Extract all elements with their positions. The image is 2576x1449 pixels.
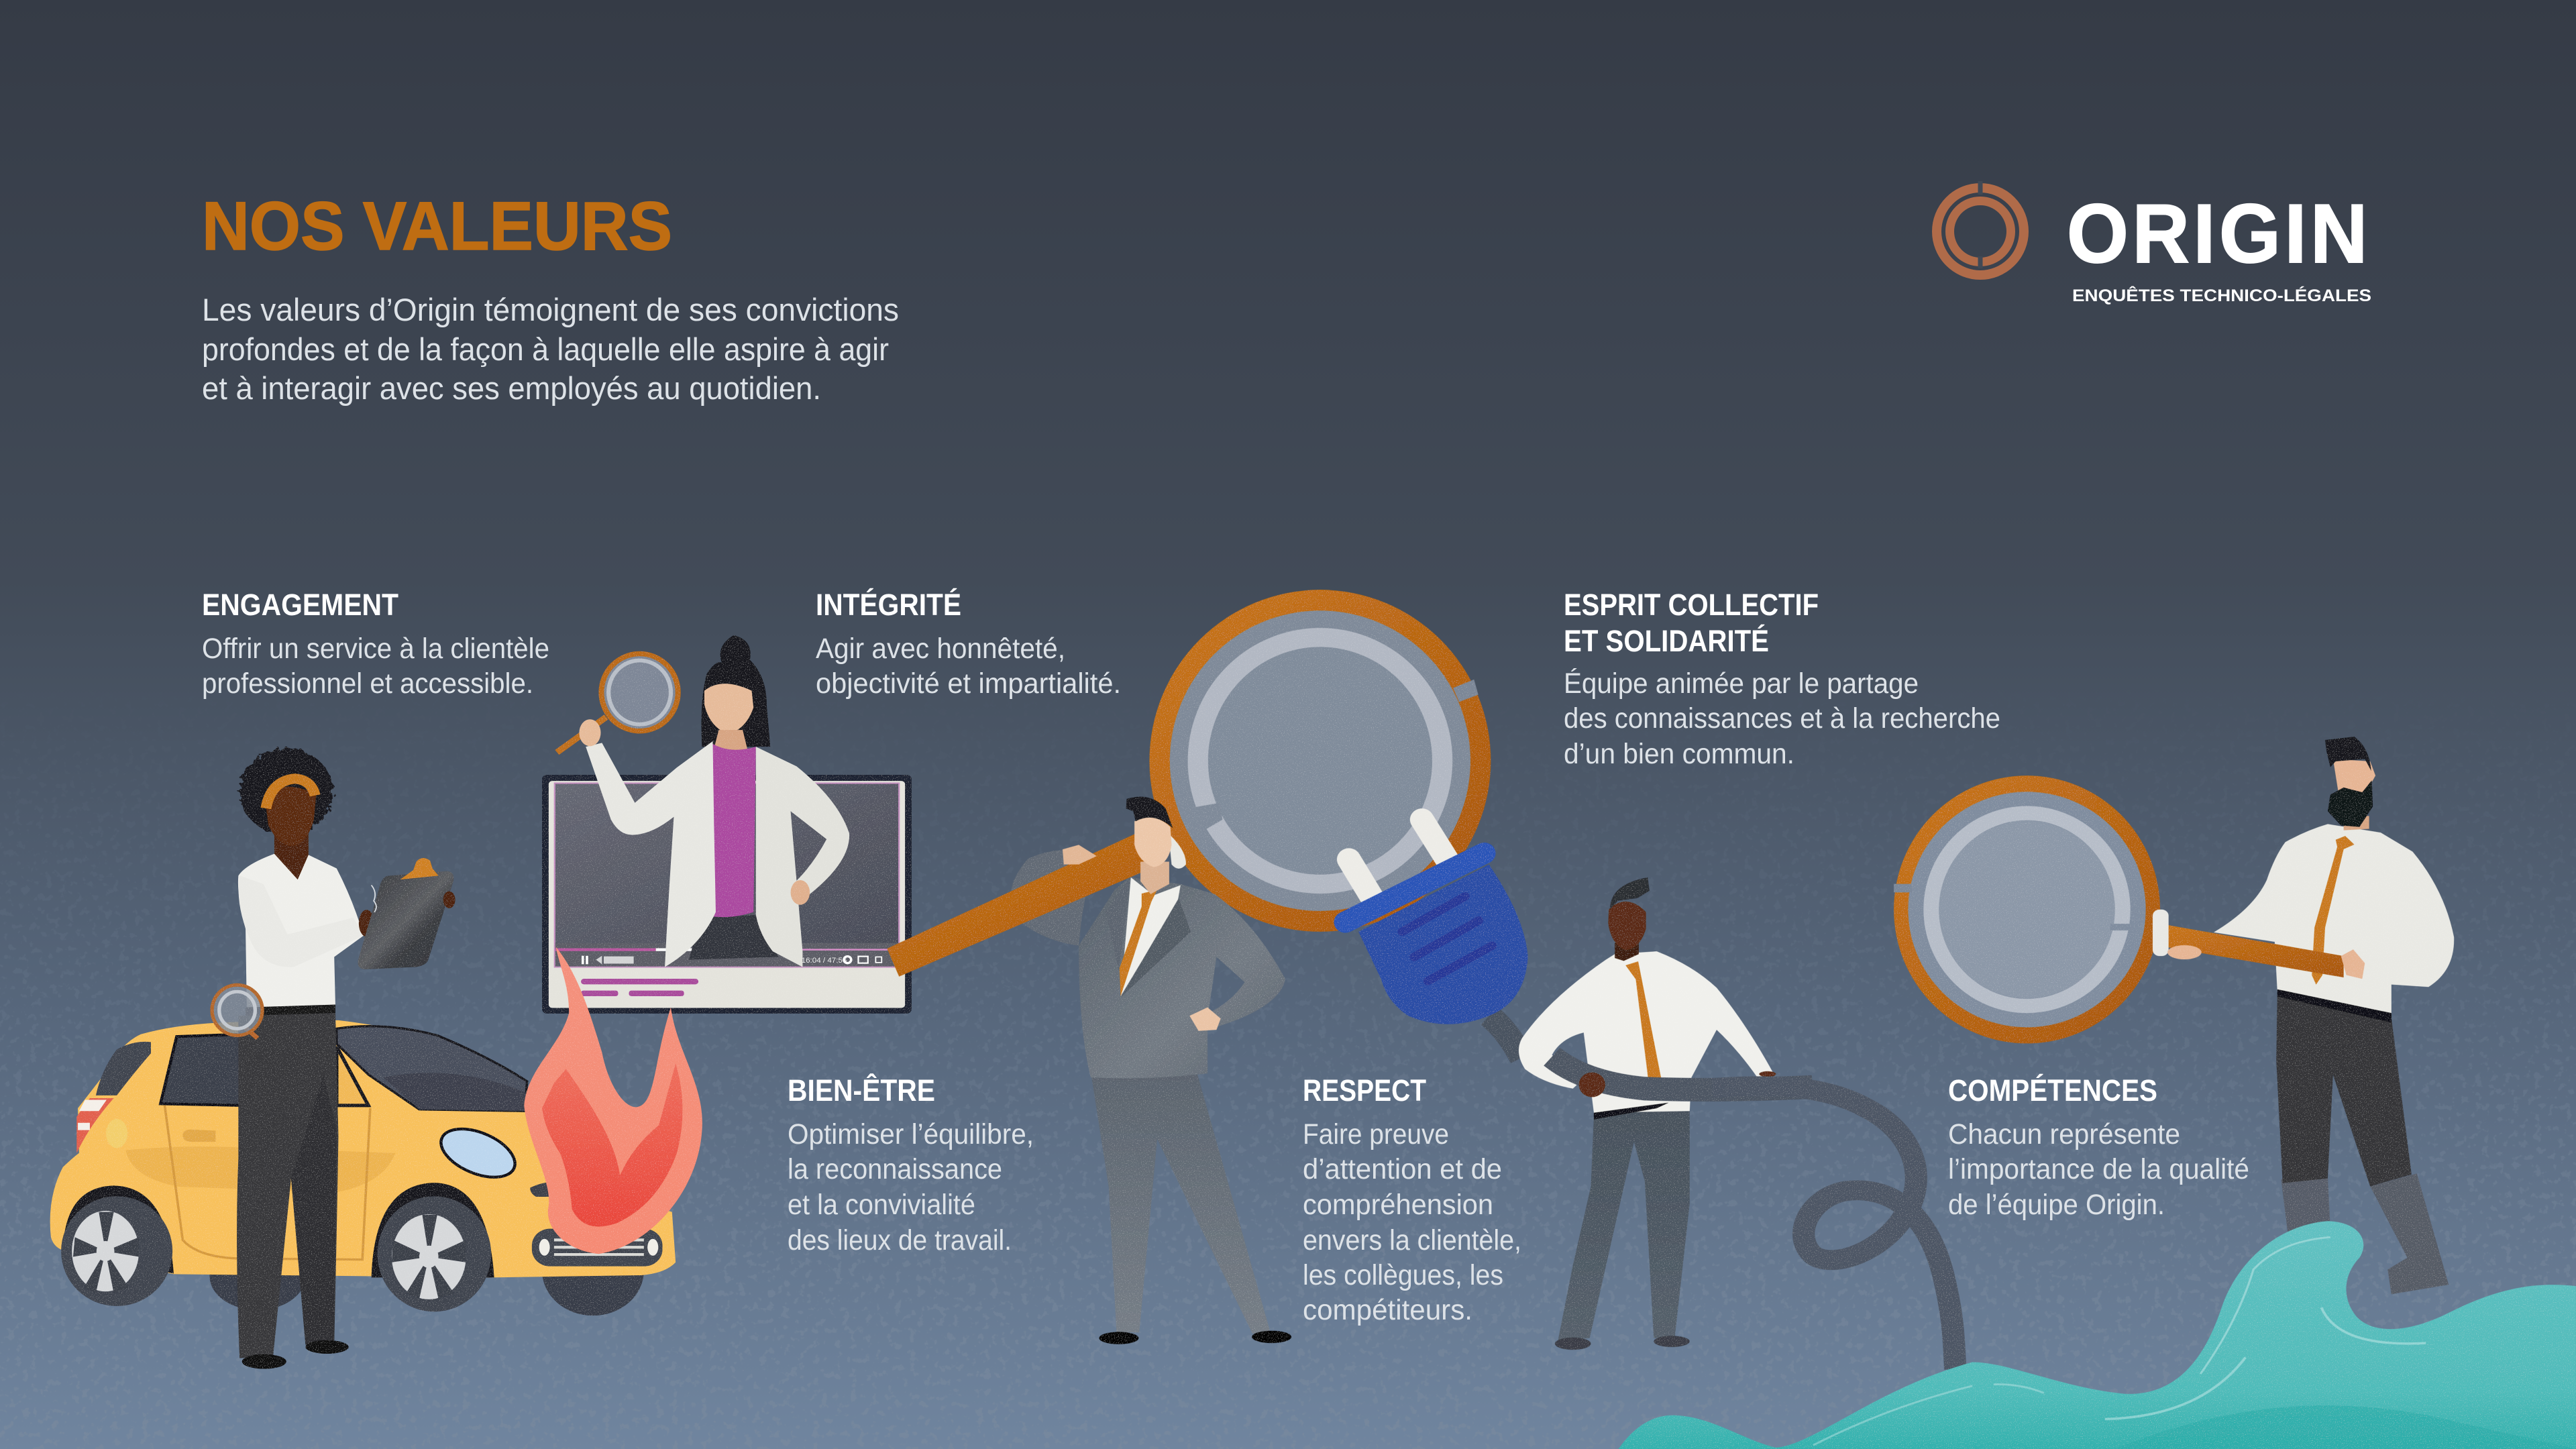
tie [2312, 836, 2354, 985]
beard [2328, 780, 2373, 827]
cable front section [1552, 1057, 1813, 1089]
shirt [238, 854, 364, 1008]
woman with clipboard [212, 749, 455, 1369]
headband [266, 779, 315, 808]
boots [2281, 1177, 2330, 1234]
value: integrity [816, 588, 1121, 700]
belt [1594, 1103, 1669, 1120]
value: skills: COMPÉTENCES [1948, 1073, 2157, 1108]
value: skills: l’importance de la qualité [1948, 1153, 2249, 1185]
scene: cable loop, man with magnifier, wave [1609, 737, 2576, 1449]
intro text: Les valeurs d’Origin témoignent de ses convictions [202, 292, 899, 327]
icon: flame [524, 947, 702, 1254]
value: team spirit: ET SOLIDARITÉ [1564, 624, 1769, 658]
value: respect: les collègues, les [1303, 1259, 1503, 1291]
logo: Origin [1937, 181, 2371, 305]
neck [2344, 816, 2369, 830]
hands [1579, 1073, 1605, 1097]
value: well-being: Optimiser l’équilibre, [788, 1118, 1034, 1150]
value: skills: Chacun représente [1948, 1118, 2180, 1150]
woman with magnifier [557, 635, 849, 967]
value: engagement: Offrir un service à la clientèle [202, 633, 549, 665]
trousers [2276, 991, 2412, 1187]
value: team spirit: Équipe animée par le partage [1564, 667, 1919, 700]
shoes [1099, 1332, 1138, 1344]
shoes [242, 1354, 286, 1369]
lab coat [586, 741, 716, 967]
value: respect: compétiteurs. [1303, 1294, 1472, 1326]
value: well-being: des lieux de travail. [788, 1224, 1012, 1256]
ear piece [1169, 834, 1186, 869]
trousers [689, 915, 779, 960]
value: team spirit: des connaissances et à la recherche [1564, 702, 2000, 735]
logo wordmark: ORIGIN [2067, 188, 2371, 280]
magenta top [704, 744, 756, 917]
shoes [1555, 1338, 1591, 1350]
cable back section [1489, 1016, 1522, 1058]
value: integrity: INTÉGRITÉ [816, 588, 961, 622]
intro text: et à interagir avec ses employés au quotidien. [202, 370, 821, 406]
magnifier [557, 653, 678, 753]
hair [2325, 737, 2371, 771]
shirt [2214, 824, 2454, 1013]
wave [1609, 1221, 2576, 1449]
clipboard [358, 871, 453, 969]
intro text [202, 292, 899, 406]
illustration layer [50, 590, 2576, 1449]
value: well-being [788, 1073, 1034, 1256]
value: team spirit [1564, 588, 2000, 770]
value: engagement: professionnel et accessible. [202, 667, 533, 700]
title: NOS VALEURS [202, 188, 672, 264]
hands [2167, 945, 2202, 959]
value: integrity: Agir avec honnêteté, [816, 633, 1065, 665]
big magnifier [887, 590, 1491, 977]
value: skills [1948, 1073, 2249, 1221]
value: respect: compréhension [1303, 1189, 1493, 1221]
hair [1610, 877, 1650, 909]
shirt [1519, 951, 1774, 1113]
value: well-being: la reconnaissance [788, 1153, 1002, 1185]
hand [359, 910, 374, 936]
icon: yellow car [50, 1020, 676, 1316]
face [2333, 759, 2375, 795]
value: respect: RESPECT [1303, 1073, 1426, 1108]
cable loop [1713, 1086, 1955, 1369]
face [704, 684, 753, 734]
hand on hip [791, 880, 810, 905]
value: respect: Faire preuve [1303, 1118, 1449, 1150]
trousers [237, 1013, 338, 1358]
jacket [1079, 877, 1285, 1078]
trousers [1091, 1072, 1271, 1334]
logo ring icon [1937, 181, 2024, 275]
value: engagement: ENGAGEMENT [202, 588, 398, 622]
value: team spirit: ESPRIT COLLECTIF [1564, 588, 1819, 622]
value: respect: d’attention et de [1303, 1153, 1502, 1185]
man with cable [1519, 877, 1813, 1350]
shirt [1121, 877, 1181, 996]
man in suit raised arm [1010, 850, 1087, 946]
trousers [1558, 1103, 1690, 1341]
man with beard [2214, 737, 2454, 1294]
neck [1140, 861, 1169, 894]
value: integrity: objectivité et impartialité. [816, 667, 1121, 700]
face [1134, 817, 1171, 867]
magnifier right [1894, 775, 2365, 1043]
belt [2277, 989, 2392, 1022]
value: skills: de l’équipe Origin. [1948, 1189, 2165, 1221]
value: respect: envers la clientèle, [1303, 1224, 1521, 1256]
scene: car, woman with clipboard, video screen, flame [50, 635, 912, 1369]
lapels [1106, 879, 1130, 971]
icon: blue plug [1345, 820, 1528, 1024]
small magnifier [212, 985, 262, 1038]
intro text: profondes et de la façon à laquelle elle aspire à agir [202, 331, 889, 367]
video timecode: 16:04 / 47:56 [802, 957, 847, 965]
hands [1063, 845, 1097, 865]
hair [239, 749, 333, 835]
man in suit [1063, 797, 1291, 1344]
value: well-being: et la convivialité [788, 1189, 975, 1221]
value: team spirit: d’un bien commun. [1564, 738, 1794, 770]
value: respect [1303, 1073, 1521, 1326]
value: engagement [202, 588, 549, 700]
value: well-being: BIEN-ÊTRE [788, 1073, 935, 1108]
hair [1126, 797, 1173, 828]
logo tagline: ENQUÊTES TECHNICO-LÉGALES [2072, 285, 2371, 305]
belt [246, 1004, 335, 1017]
scene: big magnifier, man in suit, plug, man with cable [887, 590, 1813, 1350]
hair [702, 635, 770, 747]
head [1615, 943, 1639, 961]
tie [1625, 961, 1662, 1080]
video screen [542, 775, 912, 1014]
tie [1120, 890, 1157, 996]
